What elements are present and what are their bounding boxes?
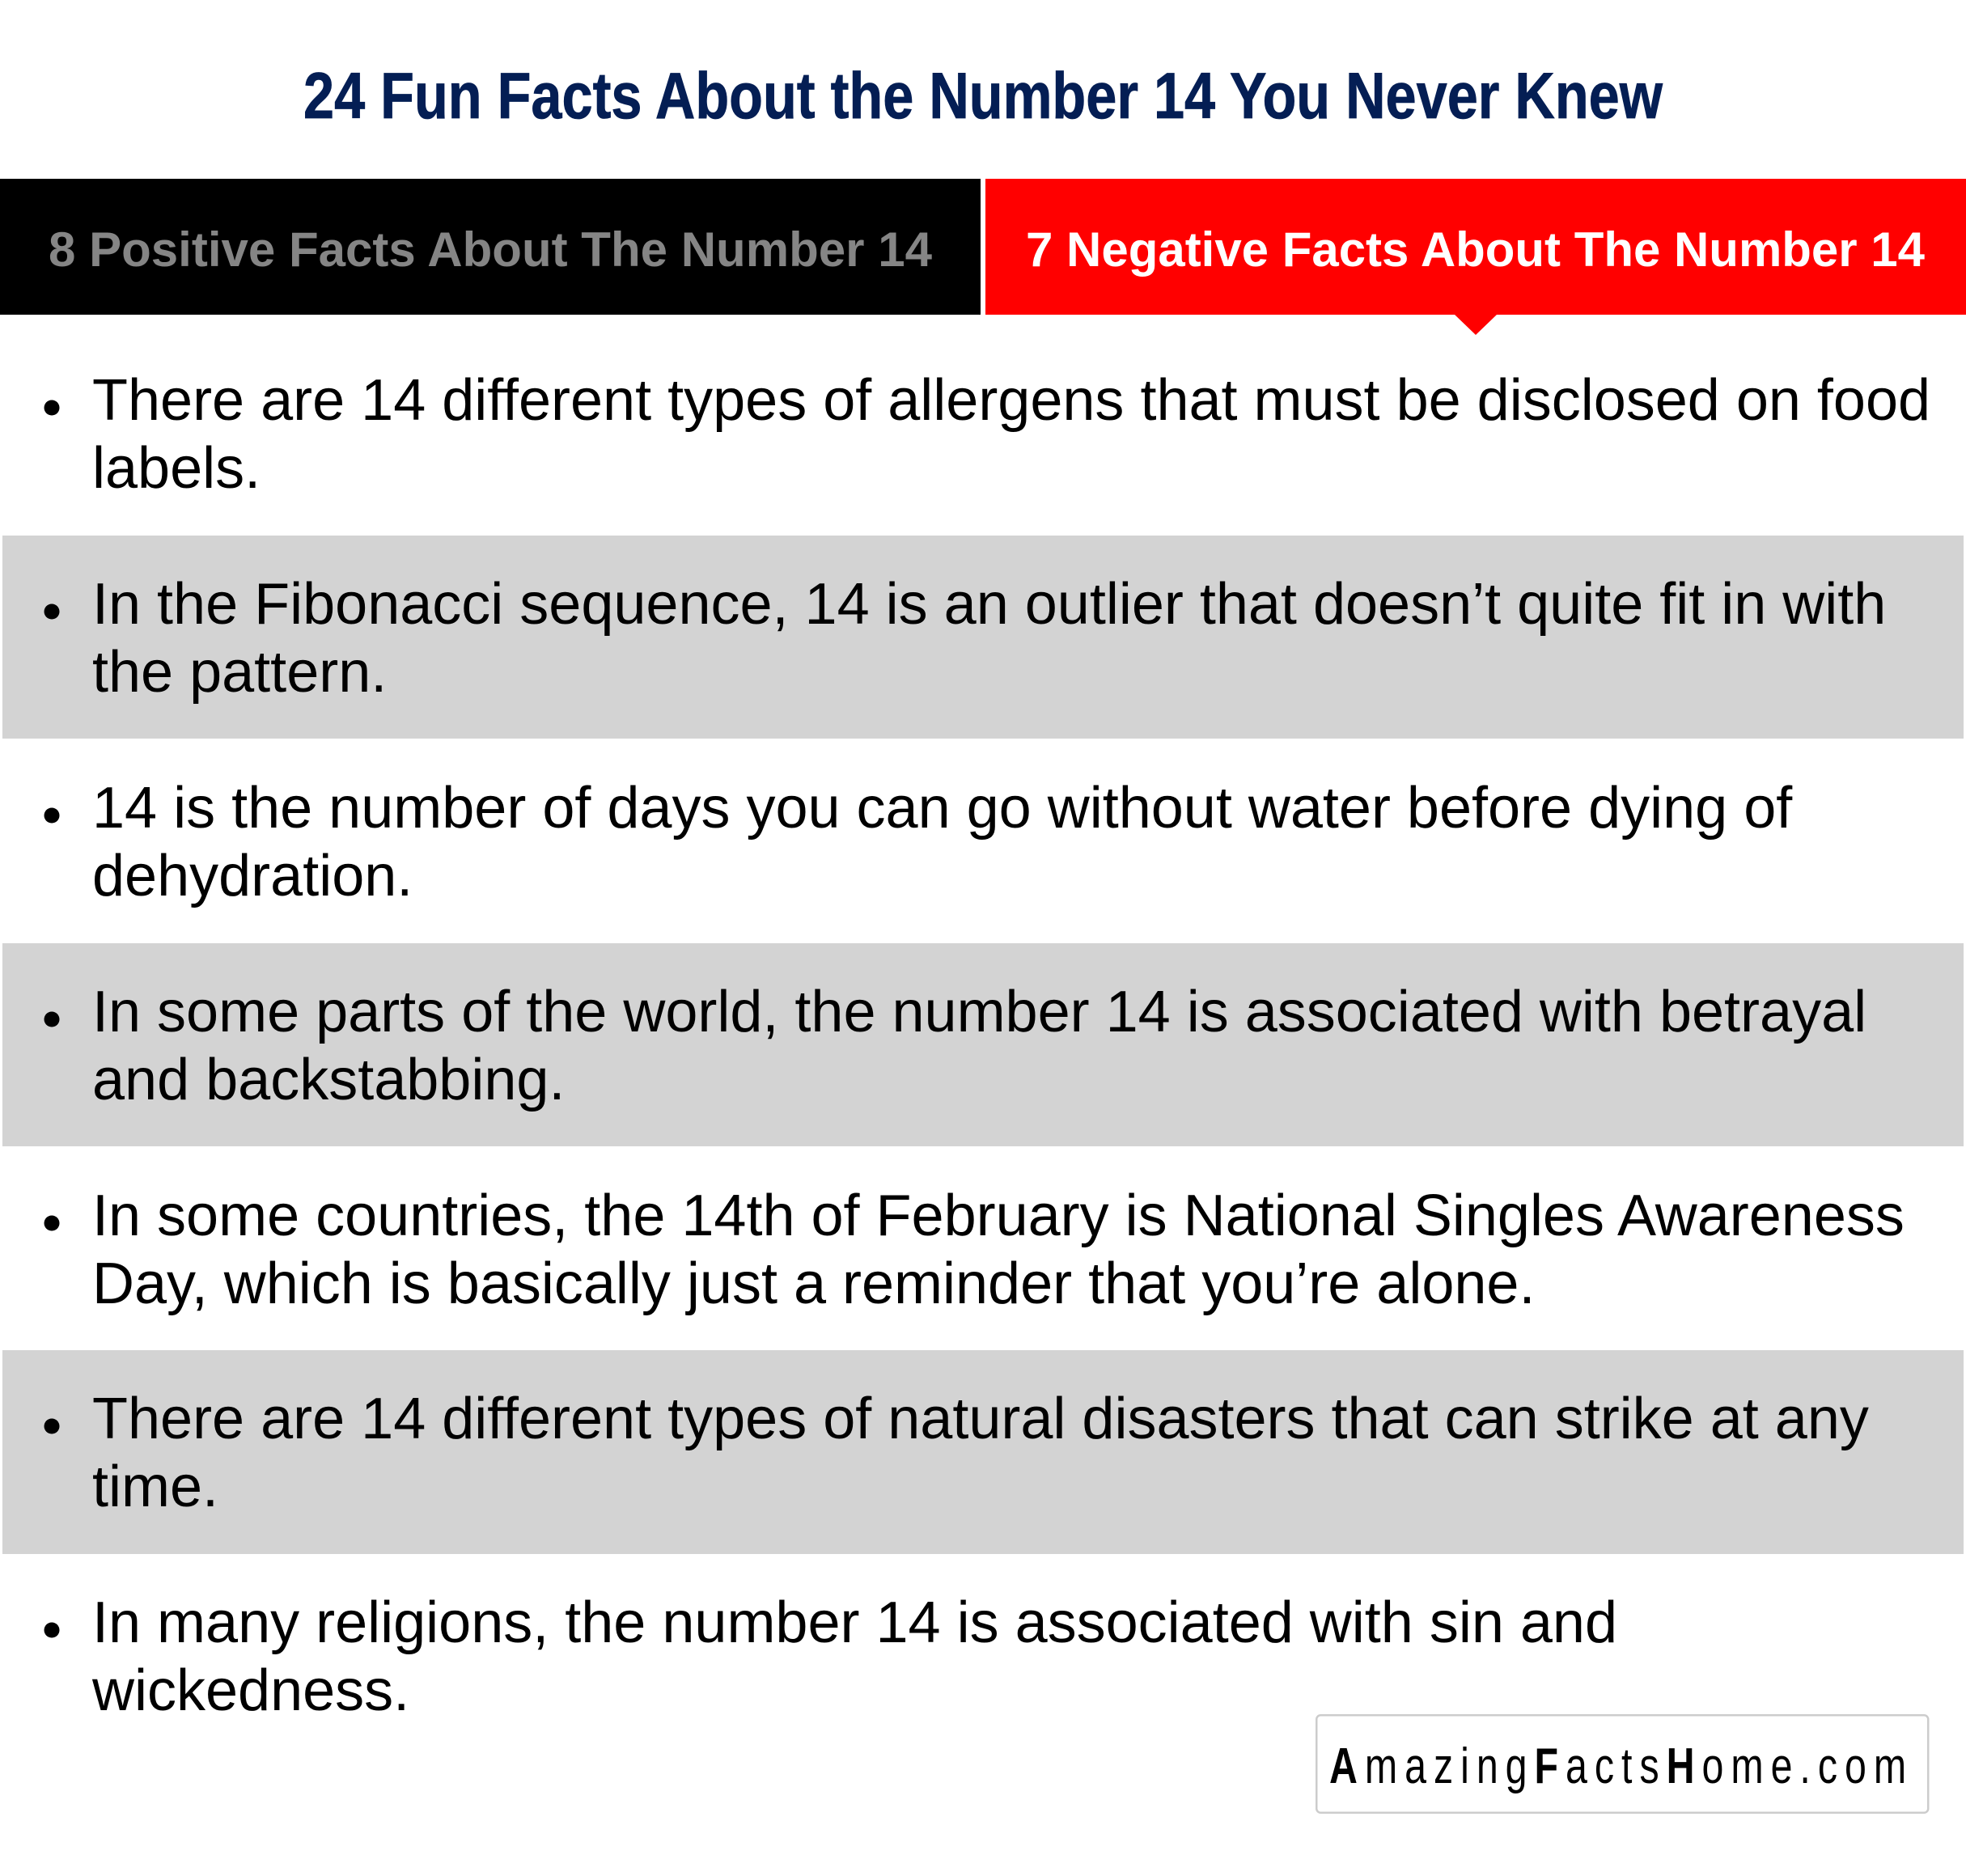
fact 2 (2, 536, 1964, 739)
fact 5: In some countries, the 14th of February is National Singles Awareness (92, 1184, 1905, 1248)
fact 2: In the Fibonacci sequence, 14 is an outlier that doesn’t quite fit in with (92, 572, 1886, 637)
fact 1 (44, 368, 1930, 501)
watermark (1316, 1715, 1928, 1813)
fact 6: There are 14 different types of natural disasters that can strike at any (92, 1387, 1869, 1451)
tab: positive facts (0, 179, 981, 315)
title: 24 Fun Facts About the Number 14 You Never Knew (303, 60, 1663, 133)
fact 7 (44, 1590, 1617, 1723)
fact 3: 14 is the number of days you can go without water before dying of (92, 776, 1793, 841)
fact 4: and backstabbing. (92, 1048, 565, 1112)
tab: negative facts: 7 Negative Facts About The Number 14 (1026, 222, 1926, 277)
fact 7: wickedness. (91, 1658, 409, 1723)
fact 1: There are 14 different types of allergens that must be disclosed on food (92, 368, 1930, 433)
tab: positive facts: 8 Positive Facts About The Number 14 (49, 222, 933, 277)
fact 6 (2, 1350, 1964, 1554)
fact 3: dehydration. (92, 844, 413, 908)
fact 5 (44, 1184, 1905, 1316)
fact 4: In some parts of the world, the number 14 is associated with betrayal (92, 980, 1866, 1044)
fact 6: time. (92, 1455, 218, 1519)
fact 3 (44, 776, 1793, 908)
fact 7: In many religions, the number 14 is associated with sin and (92, 1590, 1617, 1655)
fact 4 (2, 943, 1964, 1146)
watermark: AmazingFactsHome.com (1329, 1738, 1913, 1793)
fact 2: the pattern. (92, 640, 387, 705)
tab: negative facts (985, 179, 1966, 335)
fact 5: Day, which is basically just a reminder that you’re alone. (92, 1251, 1535, 1316)
fact 1: labels. (92, 436, 261, 501)
